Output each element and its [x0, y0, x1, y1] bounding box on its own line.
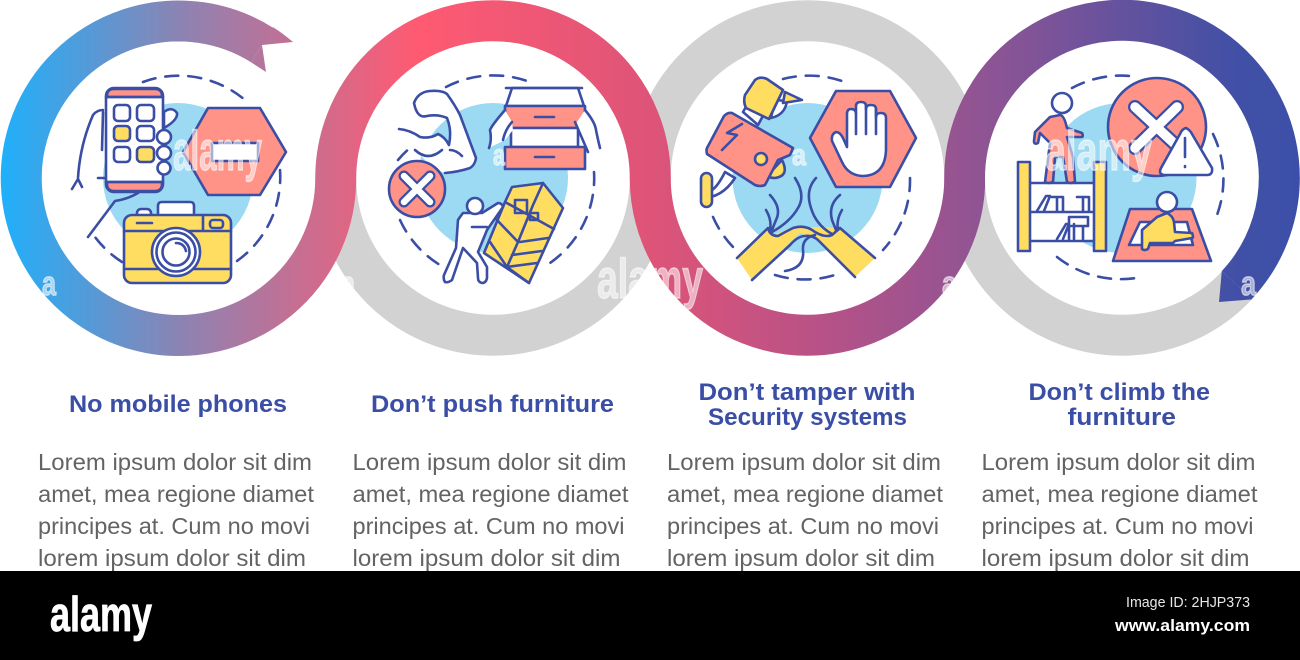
watermarks: alamy [1045, 119, 1152, 182]
climbing person [1034, 93, 1083, 183]
step 2 body: Lorem ipsum dolor sit dim [352, 449, 626, 475]
image id: Image ID: 2HJP373 [1126, 594, 1250, 611]
icon: don't tamper with security systems [701, 76, 916, 280]
step 4 body: lorem ipsum dolor sit dim [982, 545, 1250, 571]
step 3 body: lorem ipsum dolor sit dim [667, 545, 935, 571]
step 2 body: amet, mea regione diamet [352, 481, 629, 507]
step 3 body: amet, mea regione diamet [667, 481, 943, 507]
step 2 body: principes at. Cum no movi [352, 513, 624, 539]
step 3 body: principes at. Cum no movi [667, 513, 939, 539]
watermarks: a [42, 265, 57, 303]
step 3 body: Lorem ipsum dolor sit dim [667, 449, 941, 475]
step 4 heading [1028, 379, 1210, 431]
step 3 heading: Don’t tamper with [698, 379, 916, 406]
step 1 body: Lorem ipsum dolor sit dim [38, 449, 312, 475]
step 1 body: lorem ipsum dolor sit dim [38, 545, 306, 571]
step 3 heading: Security systems [708, 404, 907, 431]
black footer bar [0, 571, 1300, 660]
step 4 heading: Don’t climb the [1028, 379, 1210, 406]
step 1 heading: No mobile phones [69, 391, 287, 418]
torn wires [737, 178, 875, 280]
hand holding phone [72, 109, 177, 237]
no entry hexagon [183, 108, 286, 195]
person pushing box [444, 183, 563, 283]
step 4 body: Lorem ipsum dolor sit dim [982, 449, 1256, 475]
step 4 body: principes at. Cum no movi [982, 513, 1254, 539]
gradient snake ribbon with arrow ends [21, 20, 1279, 335]
white circles [42, 42, 1258, 314]
watermarks: a [493, 139, 505, 172]
person on rug [1113, 192, 1211, 261]
cross circle [389, 161, 445, 217]
website: www.alamy.com [1114, 616, 1250, 635]
step 2 body [352, 449, 629, 571]
footer logo: alamy [50, 588, 152, 642]
step 3 body [667, 449, 943, 571]
step 1 body: principes at. Cum no movi [38, 513, 310, 539]
step 1 body: amet, mea regione diamet [38, 481, 314, 507]
step 2 heading: Don’t push furniture [371, 391, 614, 418]
watermarks: a [1241, 265, 1257, 303]
step 4 body [982, 449, 1258, 571]
icon: don't push furniture [389, 75, 600, 283]
flexed arm [399, 91, 476, 173]
watermarks: a [341, 265, 356, 303]
stop hand hexagon [810, 91, 916, 187]
watermarks: a [792, 139, 806, 172]
icon: don't climb the furniture [1018, 76, 1223, 279]
step 1 body [38, 449, 314, 571]
watermarks: a [942, 265, 958, 303]
watermarks: alamy [597, 247, 703, 310]
step 4 heading: furniture [1068, 404, 1176, 431]
gray background ribbon [336, 21, 1279, 335]
icon: no mobile phones [72, 76, 286, 283]
step 2 body: lorem ipsum dolor sit dim [352, 545, 620, 571]
phone [106, 88, 171, 192]
step 3 heading [698, 379, 916, 431]
broken security camera [701, 78, 802, 207]
camera [124, 202, 231, 283]
bookshelf [1018, 162, 1106, 251]
watermarks: alamy [173, 119, 262, 182]
pulled drawers [489, 88, 600, 169]
cross circle with warning [1108, 78, 1212, 176]
step 4 body: amet, mea regione diamet [982, 481, 1258, 507]
watermarks [42, 119, 1257, 310]
